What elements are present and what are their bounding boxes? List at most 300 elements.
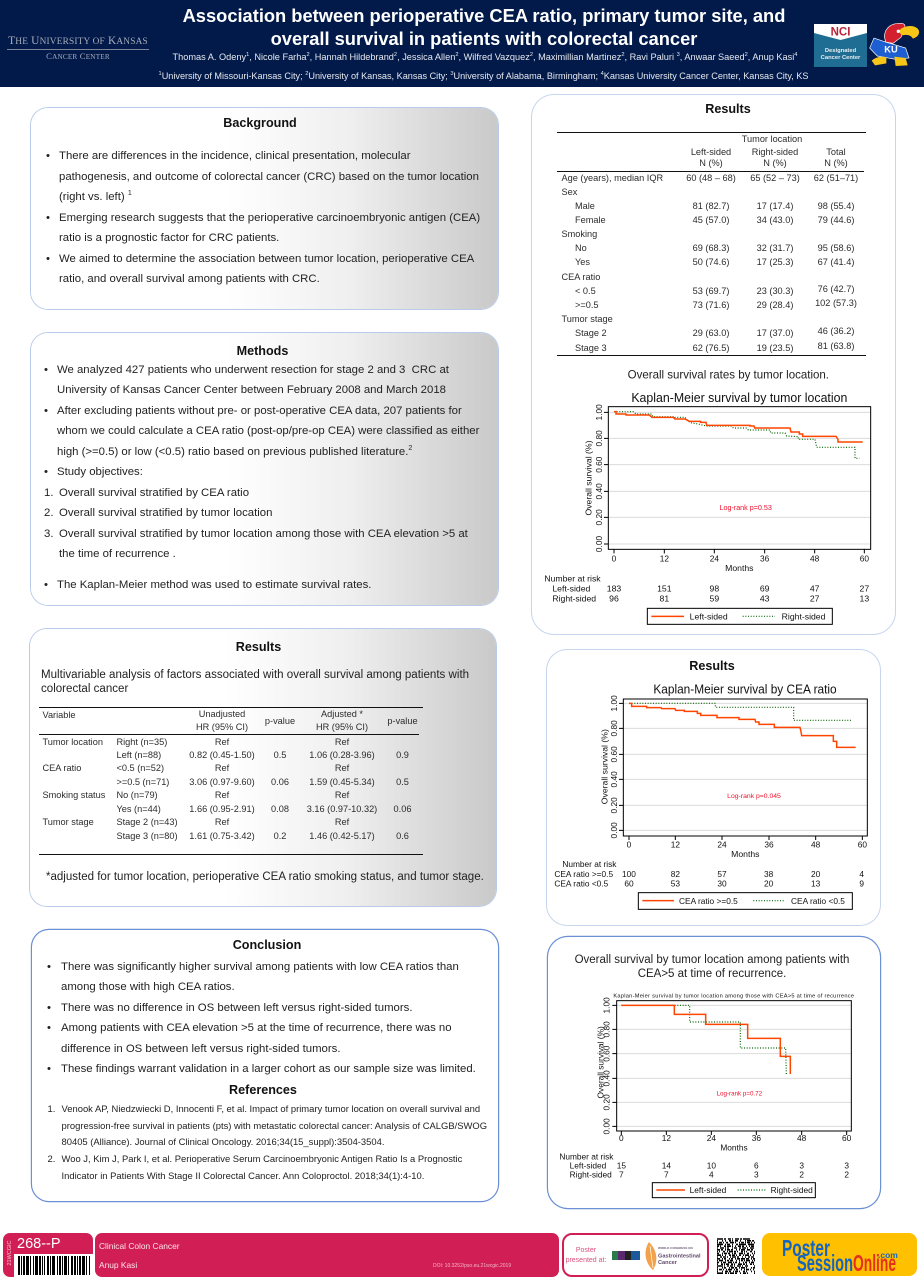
title: overall survival in patients with colorectal cancer bbox=[271, 28, 697, 49]
annotation: log-rank p: Log-rank p=0.53 bbox=[720, 504, 772, 512]
table: multivariable analysis: HR (95% CI) bbox=[316, 722, 368, 732]
affiliations: 1University of Missouri-Kansas City; 2University of Kansas, Kansas City; 3University of Alabama, Birmingham; 4Kansas University Cancer Center, Kansas City, KS bbox=[159, 71, 808, 81]
table: multivariable analysis: 0.2 bbox=[274, 831, 286, 841]
table: patient characteristics by tumor location: 65 (52 – 73) bbox=[750, 173, 800, 183]
y axis labels: 0.20 bbox=[609, 797, 619, 813]
title bbox=[183, 5, 785, 49]
number at risk table: 3 bbox=[754, 1169, 759, 1179]
chart title: Kaplan-Meier survival by tumor location bbox=[631, 391, 847, 405]
number at risk table: 43 bbox=[760, 594, 770, 604]
text block: references list: Woo J, Kim J, Park I, et al. Perioperative Serum Carcinoembryonic Antigen Ratio Is a Prognostic bbox=[62, 1153, 462, 1164]
logo: PosterSessionOnline bbox=[762, 1233, 917, 1276]
table: multivariable analysis: Ref bbox=[335, 790, 349, 800]
logo: PosterSessionOnline: Online bbox=[853, 1250, 896, 1276]
y axis labels: 0.20 bbox=[594, 509, 604, 525]
text block: conclusion bullets: There was no difference in OS between left versus right-sided tumors. bbox=[61, 1002, 412, 1014]
table: patient characteristics by tumor location: >=0.5 bbox=[575, 300, 599, 310]
x axis labels: Months bbox=[720, 1142, 748, 1152]
table: multivariable analysis: Smoking status bbox=[42, 790, 105, 800]
legend bbox=[647, 608, 832, 624]
y axis labels: Overall survival (%) bbox=[596, 1026, 606, 1098]
chart title: Kaplan-Meier survival by tumor location among those with CEA>5 at time of recurrence bbox=[613, 994, 854, 1000]
table: patient characteristics by tumor location: 29 (63.0) bbox=[693, 328, 729, 338]
x axis labels: 48 bbox=[811, 840, 821, 850]
heading: results: Results bbox=[689, 659, 735, 673]
y axis labels: 0.00 bbox=[609, 822, 619, 838]
y axis labels: Overall survival (%) bbox=[599, 729, 609, 804]
number at risk table: 100 bbox=[622, 869, 636, 879]
text: meeting code: 21WCGIC bbox=[7, 1240, 13, 1266]
table: patient characteristics by tumor location: Stage 2 bbox=[575, 328, 607, 338]
table: multivariable analysis: 0.82 (0.45-1.50) bbox=[189, 750, 255, 760]
number at risk table: CEA ratio >=0.5 bbox=[554, 869, 613, 879]
table: multivariable analysis: Tumor stage bbox=[42, 817, 94, 827]
table: patient characteristics by tumor location: 17 (25.3) bbox=[757, 257, 793, 267]
number at risk table: 7 bbox=[619, 1169, 624, 1179]
number at risk table: Left-sided bbox=[570, 1161, 607, 1171]
text block: background bullets: ratio, and overall survival among patients with CRC. bbox=[59, 273, 320, 285]
number at risk table: 13 bbox=[860, 594, 869, 604]
table: multivariable analysis: Left (n=88) bbox=[116, 750, 161, 760]
y axis labels: 0.60 bbox=[609, 746, 619, 762]
number at risk table: 98 bbox=[710, 584, 719, 594]
number at risk table: 7 bbox=[664, 1169, 669, 1179]
table: patient characteristics by tumor location: No bbox=[575, 243, 587, 253]
y axis labels: 0.60 bbox=[602, 1045, 612, 1062]
annotation: log-rank p: Log-rank p=0.045 bbox=[727, 793, 781, 800]
table: multivariable analysis: Ref bbox=[215, 817, 229, 827]
y axis labels: 1.00 bbox=[609, 695, 619, 711]
table: patient characteristics by tumor location: Female bbox=[575, 215, 606, 225]
table: patient characteristics by tumor location: 17 (17.4) bbox=[757, 201, 793, 211]
title: Association between perioperative CEA ratio, primary tumor site, and bbox=[183, 5, 785, 26]
number at risk table: Right-sided bbox=[570, 1169, 612, 1179]
logo: University of Kansas Cancer Center: CANCER CENTER bbox=[46, 51, 110, 61]
table: multivariable analysis: Ref bbox=[335, 763, 349, 773]
y axis labels: Overall survival (%) bbox=[584, 440, 594, 516]
text block: background bullets: ratio is a prognostic factor for CRC patients. bbox=[59, 232, 279, 244]
heading: results: Results bbox=[705, 102, 751, 116]
logo: NCI designated cancer center: Designated bbox=[825, 48, 857, 54]
table: patient characteristics by tumor location: N (%) bbox=[699, 158, 723, 168]
text: poster number: 268--P bbox=[17, 1236, 61, 1252]
x axis labels: 0 bbox=[627, 840, 632, 850]
logo: ESMO and world congress: Gastrointestinal bbox=[658, 1254, 701, 1260]
y axis labels: 0.80 bbox=[594, 430, 604, 446]
number at risk table bbox=[559, 1152, 849, 1179]
panel: conclusion and references: • bbox=[47, 961, 51, 973]
text block: chart heading bbox=[575, 954, 849, 980]
chart: Kaplan-Meier survival by tumor location bbox=[544, 368, 872, 625]
table: multivariable analysis bbox=[39, 707, 423, 855]
table: patient characteristics by tumor location: Male bbox=[575, 201, 595, 211]
table: patient characteristics by tumor location: 69 (68.3) bbox=[693, 243, 729, 253]
table: multivariable analysis: Ref bbox=[335, 736, 349, 746]
x axis labels: 12 bbox=[662, 1133, 671, 1143]
number at risk table: 59 bbox=[710, 594, 719, 604]
heading: results: Results bbox=[236, 640, 281, 654]
y axis labels: 0.80 bbox=[602, 1021, 612, 1037]
table: patient characteristics by tumor location: 67 (41.4) bbox=[818, 257, 854, 267]
text block: conclusion bullets: Among patients with CEA elevation >5 at the time of recurrence, there was no bbox=[61, 1022, 452, 1034]
legend: Right-sided bbox=[771, 1185, 813, 1195]
legend: Right-sided bbox=[782, 611, 826, 621]
QR code bbox=[717, 1238, 755, 1274]
text: poster presented at: presented at: bbox=[566, 1256, 606, 1264]
text block: methods bullets: high (>=0.5) or low (<0.5) ratio based on previous published literature.2 bbox=[57, 445, 412, 458]
panel: background bbox=[31, 108, 498, 309]
number at risk table: 183 bbox=[607, 584, 621, 594]
table: multivariable analysis: <0.5 (n=52) bbox=[116, 763, 164, 773]
text block: references list: Indicator in Patients With Stage II Colorectal Cancer. Ann Coloproctol. 2018;34(1):4-10. bbox=[62, 1170, 424, 1181]
table: patient characteristics by tumor location: 17 (37.0) bbox=[757, 328, 793, 338]
logo: NCI designated cancer center: NCI bbox=[831, 26, 850, 38]
text: session name: Clinical Colon Cancer bbox=[99, 1241, 180, 1251]
footnote: *adjusted for tumor location, perioperative CEA ratio smoking status, and tumor stage. bbox=[46, 871, 484, 883]
text block: methods bullets: • bbox=[44, 579, 48, 591]
x axis labels bbox=[612, 553, 869, 573]
table: multivariable analysis: No (n=79) bbox=[116, 790, 158, 800]
legend bbox=[638, 893, 852, 909]
text block: methods bullets: • bbox=[44, 364, 48, 376]
x axis labels: Months bbox=[725, 563, 754, 573]
text block: table caption bbox=[41, 669, 469, 695]
table: multivariable analysis: p-value bbox=[387, 716, 418, 726]
number at risk table: 47 bbox=[810, 584, 820, 594]
text block: methods bullets bbox=[44, 364, 480, 591]
x axis labels: 24 bbox=[707, 1133, 716, 1143]
table: multivariable analysis: 0.9 bbox=[396, 750, 409, 760]
text block: background bullets: pathogenesis, and outcome of colorectal cancer (CRC) based on the tumor location bbox=[59, 170, 479, 182]
y axis labels: 0.40 bbox=[602, 1070, 612, 1086]
text block: background bullets: Emerging research suggests that the perioperative carcinoembryonic antigen (CEA) bbox=[59, 212, 480, 224]
logo: NCI designated cancer center bbox=[814, 24, 867, 67]
text: DOI: DOI: 10.3252/pso.eu.21wcgic.2019 bbox=[433, 1263, 511, 1269]
table: patient characteristics by tumor location: Left-sided bbox=[691, 147, 731, 157]
x axis labels: 12 bbox=[671, 840, 680, 850]
y axis labels: 0.20 bbox=[602, 1094, 612, 1110]
table: multivariable analysis: 1.46 (0.42-5.17) bbox=[309, 831, 375, 841]
number at risk table: 20 bbox=[764, 879, 774, 889]
number at risk table: 15 bbox=[617, 1161, 626, 1171]
table: patient characteristics by tumor location: 19 (23.5) bbox=[757, 343, 793, 353]
number at risk table: 53 bbox=[671, 879, 680, 889]
table: multivariable analysis: Right (n=35) bbox=[116, 736, 167, 746]
legend bbox=[652, 1183, 815, 1198]
text block: conclusion bullets: difference in OS between left versus right-sided tumors. bbox=[61, 1043, 340, 1055]
y axis labels: 0.40 bbox=[609, 771, 619, 787]
legend: CEA ratio >=0.5 bbox=[679, 896, 738, 906]
table: patient characteristics by tumor location bbox=[557, 132, 866, 356]
table: multivariable analysis: 0.6 bbox=[396, 831, 409, 841]
text block: references list: progression-free survival in patients (pts) with metastatic colorectal cancer: Analysis of CALGB/SWOG bbox=[62, 1120, 487, 1131]
table: patient characteristics by tumor location: 98 (55.4) bbox=[818, 201, 854, 211]
legend: CEA ratio <0.5 bbox=[791, 896, 845, 906]
table: patient characteristics by tumor location: < 0.5 bbox=[575, 286, 596, 296]
chart title: Kaplan-Meier survival by CEA ratio bbox=[653, 682, 837, 696]
y axis labels: 0.40 bbox=[594, 483, 604, 499]
text block: methods bullets: We analyzed 427 patients who underwent resection for stage 2 and 3 CRC at bbox=[57, 364, 449, 376]
text block: conclusion bullets: There was significantly higher survival among patients with low CEA ratios than bbox=[61, 961, 459, 973]
text block: background bullets: • bbox=[46, 150, 50, 162]
survival curve: CEA ratio below 0.5 bbox=[629, 703, 851, 720]
table: multivariable analysis: Unadjusted bbox=[199, 709, 245, 719]
text block: chart heading: Overall survival by tumor location among patients with bbox=[575, 954, 849, 966]
table: multivariable analysis: Yes (n=44) bbox=[116, 804, 161, 814]
table: multivariable analysis: Stage 3 (n=80) bbox=[116, 831, 178, 841]
table: patient characteristics by tumor location: 76 (42.7) bbox=[818, 284, 854, 294]
table: patient characteristics by tumor location: Tumor stage bbox=[562, 314, 613, 324]
panel: conclusion and references: • bbox=[47, 1022, 51, 1034]
x axis labels: 60 bbox=[858, 840, 867, 850]
table: multivariable analysis: 0.5 bbox=[274, 750, 286, 760]
chart: survival by tumor location among CEA above 5 bbox=[559, 994, 854, 1198]
footer: poster presented at box bbox=[562, 1233, 709, 1277]
table: patient characteristics by tumor location: Age (years), median IQR bbox=[562, 173, 663, 183]
text block: methods bullets: 1. bbox=[44, 487, 53, 499]
y axis labels: 0.00 bbox=[602, 1118, 612, 1134]
table: patient characteristics by tumor location: Sex bbox=[562, 187, 577, 197]
footer: poster ID with barcode bbox=[3, 1233, 93, 1277]
table: patient characteristics by tumor location: Stage 3 bbox=[575, 343, 607, 353]
barcode bbox=[14, 1254, 93, 1277]
table: patient characteristics by tumor location: 79 (44.6) bbox=[818, 215, 854, 225]
text block: methods bullets: Overall survival stratified by tumor location among those with CEA elevation >5 at bbox=[59, 528, 468, 540]
x axis labels: Months bbox=[731, 849, 760, 859]
text block: methods bullets: • bbox=[44, 405, 48, 417]
x axis labels: 24 bbox=[710, 553, 719, 563]
x axis labels: 24 bbox=[717, 840, 727, 850]
table: patient characteristics by tumor location: 50 (74.6) bbox=[693, 257, 729, 267]
number at risk table: 2 bbox=[799, 1169, 804, 1179]
number at risk table: 81 bbox=[660, 594, 669, 604]
logo: PosterSessionOnline: .com bbox=[878, 1250, 898, 1260]
table: patient characteristics by tumor location: 62 (76.5) bbox=[693, 343, 729, 353]
heading: methods: Methods bbox=[237, 344, 288, 358]
logo: University of Kansas Cancer Center bbox=[7, 35, 149, 61]
y axis labels bbox=[599, 695, 619, 838]
logo: ESMO and world congress bbox=[612, 1242, 701, 1270]
heading: conclusion: Conclusion bbox=[233, 938, 301, 952]
annotation: log-rank p: Log-rank p=0.72 bbox=[717, 1090, 763, 1097]
table: multivariable analysis: 1.61 (0.75-3.42) bbox=[189, 831, 255, 841]
number at risk table: 151 bbox=[657, 584, 672, 594]
table: patient characteristics by tumor location: 102 (57.3) bbox=[815, 298, 857, 308]
survival curve: left-sided bbox=[621, 1005, 790, 1074]
table: multivariable analysis: >=0.5 (n=71) bbox=[116, 777, 169, 787]
text block: references list bbox=[48, 1103, 487, 1181]
panel: conclusion and references: • bbox=[47, 1063, 51, 1075]
table: patient characteristics by tumor location: CEA ratio bbox=[562, 272, 600, 282]
x axis labels: 60 bbox=[842, 1133, 852, 1143]
chart: Kaplan-Meier survival by CEA ratio bbox=[554, 682, 868, 910]
text block: methods bullets: 3. bbox=[44, 528, 53, 540]
number at risk table: 30 bbox=[717, 879, 727, 889]
table: patient characteristics by tumor location: 60 (48 – 68) bbox=[686, 173, 736, 183]
table: multivariable analysis: Tumor location bbox=[42, 736, 103, 746]
panel: results table and tumor location survival bbox=[532, 95, 895, 634]
x axis labels: 12 bbox=[660, 553, 669, 563]
table: multivariable analysis: Adjusted * bbox=[321, 709, 363, 719]
text block: background bullets bbox=[46, 150, 480, 285]
table: patient characteristics by tumor location: Total bbox=[826, 147, 846, 157]
table: multivariable analysis: HR (95% CI) bbox=[196, 722, 248, 732]
text block: methods bullets: • bbox=[44, 466, 48, 478]
logo: ESMO and world congress: Cancer bbox=[658, 1260, 678, 1266]
number at risk table: Left-sided bbox=[552, 584, 591, 594]
number at risk table: 13 bbox=[811, 879, 821, 889]
text block: references list: Venook AP, Niedzwiecki D, Innocenti F, et al. Impact of primary tumor location on overall survival and bbox=[62, 1103, 480, 1114]
text block: methods bullets: Overall survival stratified by CEA ratio bbox=[59, 487, 249, 499]
panel: multivariable results bbox=[30, 629, 496, 906]
number at risk table bbox=[544, 574, 869, 604]
number at risk table: 3 bbox=[799, 1161, 804, 1171]
x axis labels: 0 bbox=[619, 1133, 624, 1143]
table: multivariable analysis: 0.08 bbox=[271, 804, 289, 814]
y axis labels: 0.60 bbox=[594, 456, 604, 473]
text block: background bullets: There are differences in the incidence, clinical presentation, molecular bbox=[59, 150, 410, 162]
number at risk table: Number at risk bbox=[544, 574, 601, 584]
text: poster presented at: Poster bbox=[576, 1247, 596, 1254]
table: patient characteristics by tumor location: 34 (43.0) bbox=[757, 215, 793, 225]
text block: conclusion bullets: These findings warrant validation in a larger cohort as our sample size was limited. bbox=[61, 1063, 476, 1075]
number at risk table: 60 bbox=[624, 879, 634, 889]
y axis labels: 0.80 bbox=[609, 720, 619, 736]
table: multivariable analysis: Ref bbox=[215, 790, 229, 800]
logo: PosterSessionOnline: Poster bbox=[782, 1235, 830, 1261]
x axis labels: 48 bbox=[797, 1133, 807, 1143]
x axis labels: 60 bbox=[860, 553, 869, 563]
x axis labels bbox=[627, 840, 867, 859]
number at risk table: 2 bbox=[844, 1169, 849, 1179]
text block: background bullets: (right vs. left) 1 bbox=[59, 190, 132, 203]
table: multivariable analysis: 1.66 (0.95-2.91) bbox=[189, 804, 255, 814]
table: patient characteristics by tumor location: Yes bbox=[575, 257, 590, 267]
number at risk table: 20 bbox=[811, 869, 821, 879]
text: poster presented at bbox=[566, 1247, 606, 1264]
text block: conclusion bullets: among those with high CEA ratios. bbox=[61, 981, 235, 993]
text block: background bullets: We aimed to determine the association between tumor location, perioperative CEA bbox=[59, 252, 474, 264]
heading: references: References bbox=[229, 1083, 297, 1097]
panel: conclusion and references: 2. bbox=[48, 1153, 55, 1164]
text block: methods bullets: University of Kansas Cancer Center between February 2008 and March 2018 bbox=[57, 384, 446, 396]
table: patient characteristics by tumor location: 32 (31.7) bbox=[757, 243, 793, 253]
x axis labels: 36 bbox=[760, 553, 770, 563]
number at risk table: 14 bbox=[662, 1161, 671, 1171]
logo: NCI designated cancer center: Cancer Center bbox=[821, 55, 861, 61]
survival curve: left-sided bbox=[614, 412, 863, 442]
number at risk table: 10 bbox=[707, 1161, 716, 1171]
panel: conclusion and references: 1. bbox=[48, 1103, 55, 1114]
panel: conclusion and references bbox=[32, 930, 498, 1201]
number at risk table: CEA ratio <0.5 bbox=[554, 879, 609, 889]
x axis labels: 36 bbox=[752, 1133, 761, 1143]
table: multivariable analysis: 1.06 (0.28-3.96) bbox=[309, 750, 375, 760]
heading: background: Background bbox=[223, 116, 297, 130]
text block: table caption: colorectal cancer bbox=[41, 683, 128, 695]
table: patient characteristics by tumor location: 53 (69.7) bbox=[693, 286, 729, 296]
legend: Left-sided bbox=[690, 1185, 727, 1195]
table: patient characteristics by tumor location: 81 (82.7) bbox=[693, 201, 729, 211]
y axis labels: 1.00 bbox=[594, 404, 604, 420]
number at risk table: 69 bbox=[760, 584, 770, 594]
table: patient characteristics by tumor location: 95 (58.6) bbox=[818, 243, 854, 253]
survival curve: right-sided bbox=[614, 412, 859, 458]
text block: methods bullets: After excluding patients without pre- or post-operative CEA data, 207 patients for bbox=[57, 405, 462, 417]
panel: survival by CEA ratio bbox=[547, 650, 880, 925]
table: patient characteristics by tumor location: N (%) bbox=[763, 158, 787, 168]
number at risk table: 6 bbox=[754, 1161, 759, 1171]
x axis labels: 36 bbox=[764, 840, 774, 850]
text block: methods bullets: The Kaplan-Meier method was used to estimate survival rates. bbox=[57, 579, 371, 591]
number at risk table: 3 bbox=[844, 1161, 849, 1171]
table: multivariable analysis: 0.06 bbox=[271, 777, 289, 787]
chart subtitle: Overall survival rates by tumor location. bbox=[628, 368, 829, 382]
table: patient characteristics by tumor location: N (%) bbox=[824, 158, 848, 168]
table: multivariable analysis: Ref bbox=[215, 736, 229, 746]
number at risk table: 38 bbox=[764, 869, 774, 879]
table: multivariable analysis: 3.06 (0.97-9.60) bbox=[189, 777, 255, 787]
survival curve: right-sided bbox=[621, 1005, 786, 1075]
icon: KU Jayhawk mascot: KU bbox=[885, 44, 898, 54]
text block: table caption: Multivariable analysis of factors associated with overall survival among patients with bbox=[41, 669, 469, 681]
legend: Left-sided bbox=[690, 611, 728, 621]
table: patient characteristics by tumor location: 81 (63.8) bbox=[818, 341, 854, 351]
header banner bbox=[0, 0, 924, 87]
x axis labels bbox=[619, 1133, 852, 1152]
table: multivariable analysis: Ref bbox=[215, 763, 229, 773]
table: patient characteristics by tumor location: 23 (30.3) bbox=[757, 286, 793, 296]
number at risk table: 96 bbox=[609, 594, 619, 604]
number at risk table: 82 bbox=[671, 869, 680, 879]
text block: methods bullets: 2. bbox=[44, 507, 53, 519]
table: patient characteristics by tumor location: 62 (51–71) bbox=[814, 173, 858, 183]
table: patient characteristics by tumor location: Smoking bbox=[562, 229, 597, 239]
panel: survival with CEA above 5 at recurrence bbox=[548, 937, 880, 1208]
logo: University of Kansas Cancer Center: THE UNIVERSITY OF KANSAS bbox=[8, 35, 148, 47]
text block: background bullets: • bbox=[46, 252, 50, 264]
text block: background bullets: • bbox=[46, 212, 50, 224]
table: patient characteristics by tumor location: 29 (28.4) bbox=[757, 300, 793, 310]
table: multivariable analysis: 1.59 (0.45-5.34) bbox=[309, 777, 375, 787]
icon: KU Jayhawk mascot bbox=[869, 23, 920, 66]
panel: conclusion and references: • bbox=[47, 1002, 51, 1014]
text block: references list: 80405 (Alliance). Journal of Clinical Oncology. 2016;34(15_suppl):3504-3504. bbox=[62, 1136, 384, 1147]
number at risk table: 4 bbox=[709, 1169, 714, 1179]
number at risk table: Number at risk bbox=[559, 1152, 614, 1162]
number at risk table: Number at risk bbox=[562, 859, 617, 869]
table: multivariable analysis: Variable bbox=[42, 710, 76, 720]
y axis labels: 1.00 bbox=[602, 997, 612, 1013]
number at risk table: 27 bbox=[860, 584, 869, 594]
table: patient characteristics by tumor location: 73 (71.6) bbox=[693, 300, 729, 310]
table: multivariable analysis: Ref bbox=[335, 817, 349, 827]
authors: Thomas A. Odeny1, Nicole Farha2, Hannah Hildebrand2, Jessica Allen2, Wilfred Vazquez2, Maximillian Martinez2, Ravi Paluri 3, Anwaar Saeed2, Anup Kasi4 bbox=[173, 52, 797, 62]
logo: ESMO and world congress: WORLD CONGRESS ON bbox=[658, 1246, 693, 1250]
table: multivariable analysis: 0.5 bbox=[396, 777, 409, 787]
table: patient characteristics by tumor location: Right-sided bbox=[752, 147, 798, 157]
table: multivariable analysis: 3.16 (0.97-10.32) bbox=[307, 804, 377, 814]
number at risk table: Right-sided bbox=[552, 594, 596, 604]
x axis labels: 0 bbox=[612, 553, 617, 563]
logo: PosterSessionOnline: Session bbox=[797, 1250, 853, 1276]
text block: conclusion bullets bbox=[47, 961, 476, 1075]
number at risk table: 27 bbox=[810, 594, 820, 604]
y axis labels bbox=[596, 997, 612, 1134]
table: multivariable analysis: 0.06 bbox=[394, 804, 411, 814]
text block: methods bullets: whom we could calculate a CEA ratio (post-op/pre-op CEA) were classified as either bbox=[57, 425, 479, 437]
text block: methods bullets: Study objectives: bbox=[57, 466, 143, 478]
